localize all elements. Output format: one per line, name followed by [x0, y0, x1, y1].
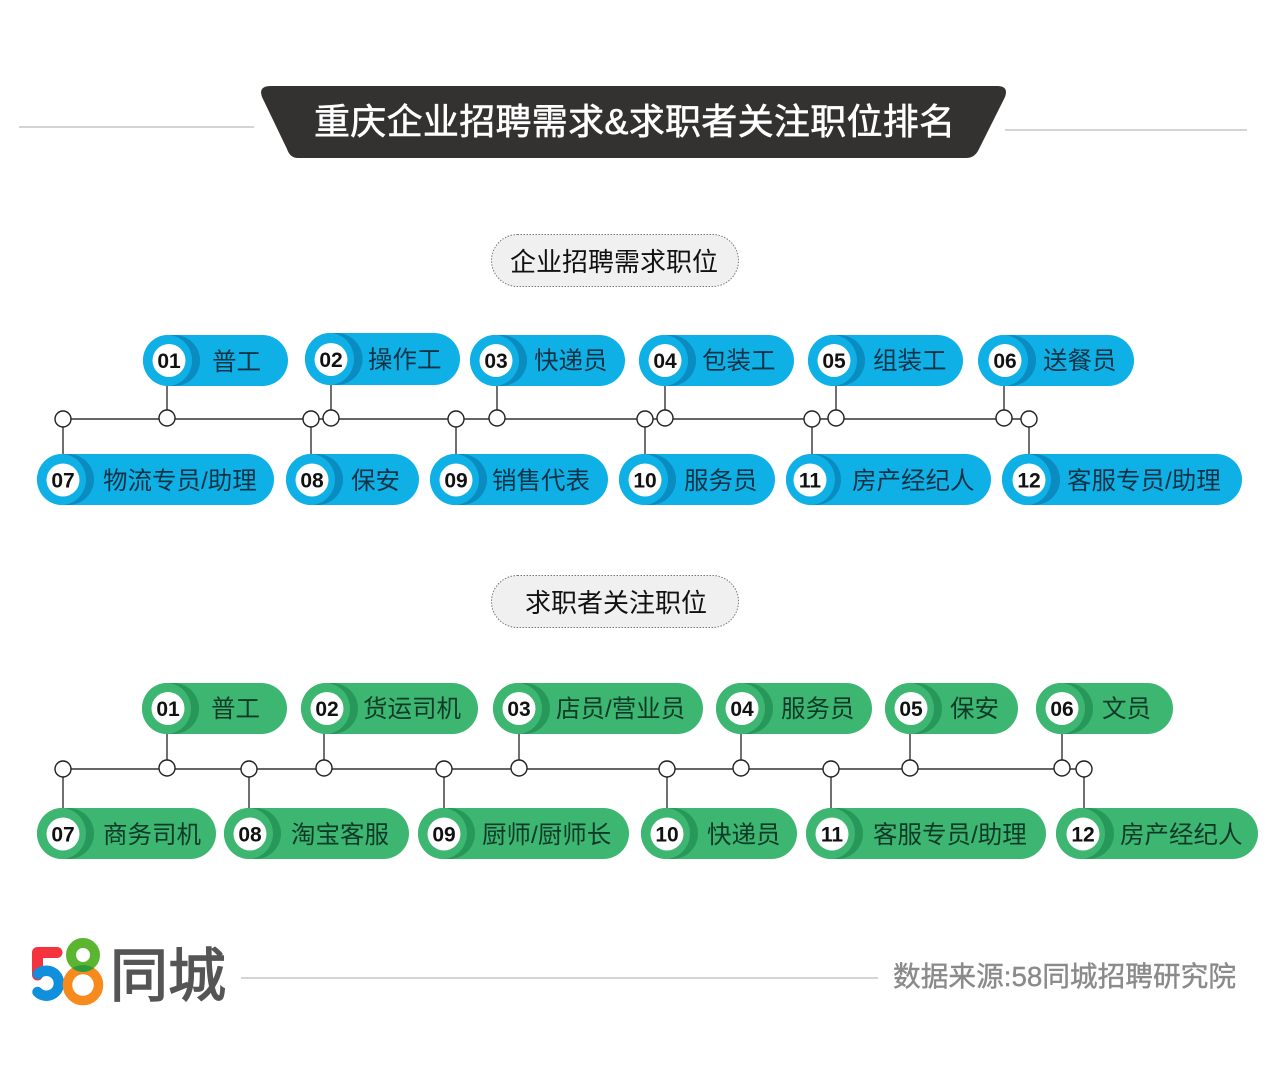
pill: blue 06 送餐员	[978, 335, 1134, 386]
pill: blue 11 房产经纪人: 房产经纪人	[852, 467, 974, 495]
pill: blue 12 客服专员/助理: 客服专员/助理	[1067, 467, 1221, 495]
pill: green 03 店员/营业员	[493, 683, 703, 734]
pill: green 01 普工	[142, 683, 287, 734]
logo: 58同城	[38, 943, 226, 1009]
pill: green 03 店员/营业员: 03	[507, 698, 531, 721]
pill: green 08 淘宝客服	[224, 808, 409, 859]
section label: 企业招聘需求职位	[492, 234, 738, 286]
pill: blue 12 客服专员/助理: 12	[1017, 470, 1041, 492]
pill: green 10 快递员: 快递员	[707, 821, 780, 849]
pill: blue 02 操作工: 02	[319, 349, 343, 372]
pill: blue 11 房产经纪人	[786, 454, 991, 505]
pill: blue 04 包装工	[639, 335, 794, 386]
pill: blue 04 包装工: 包装工	[702, 347, 776, 375]
pill: green 02 货运司机: 货运司机	[363, 695, 461, 723]
pill: blue 10 服务员: 服务员	[684, 467, 758, 495]
pill: green 07 商务司机: 商务司机	[103, 821, 201, 849]
pill: blue 08 保安	[286, 454, 419, 505]
pill: blue 06 送餐员: 送餐员	[1043, 347, 1116, 375]
pill: blue 11 房产经纪人: 11	[799, 470, 821, 492]
pill: green 01 普工: 普工	[211, 695, 260, 723]
pill: green 09 厨师/厨师长: 厨师/厨师长	[482, 821, 611, 849]
title: 重庆企业招聘需求&求职者关注职位排名	[314, 101, 955, 142]
pill: green 10 快递员	[641, 808, 797, 859]
pill: blue 03 快递员	[470, 335, 625, 386]
pill: blue 02 操作工	[305, 333, 460, 385]
pill: green 12 房产经纪人: 12	[1071, 824, 1095, 846]
pill: green 10 快递员: 10	[655, 824, 679, 846]
pill: green 11 客服专员/助理: 客服专员/助理	[873, 821, 1027, 849]
pill: green 11 客服专员/助理: 11	[821, 824, 843, 846]
pill: green 09 厨师/厨师长	[418, 808, 629, 859]
pill: blue 07 物流专员/助理: 物流专员/助理	[103, 467, 257, 495]
pill: blue 02 操作工: 操作工	[368, 346, 442, 374]
pill: blue 07 物流专员/助理	[37, 454, 274, 505]
pill: blue 01 普工: 普工	[212, 348, 261, 376]
pill: blue 01 普工: 01	[157, 350, 181, 373]
pill: blue 10 服务员: 10	[633, 470, 657, 492]
pill: green 06 文员	[1036, 683, 1173, 734]
pill: green 06 文员: 文员	[1102, 695, 1151, 723]
section label: 求职者关注职位	[492, 576, 738, 628]
section label: 企业招聘需求职位: 企业招聘需求职位	[510, 247, 718, 277]
pill: green 05 保安	[885, 683, 1018, 734]
pill: green 02 货运司机: 02	[315, 698, 339, 721]
pill: blue 09 销售代表: 09	[444, 470, 468, 492]
pill: green 07 商务司机	[37, 808, 216, 859]
pill: blue 08 保安: 08	[300, 470, 324, 492]
timeline: employer demand	[55, 385, 1037, 454]
logo wordmark: 同城	[110, 944, 226, 1009]
pill: blue 10 服务员	[619, 454, 775, 505]
pill: green 04 服务员	[716, 683, 872, 734]
pill: green 03 店员/营业员: 店员/营业员	[556, 695, 685, 723]
pill: blue 09 销售代表: 销售代表	[492, 467, 590, 495]
pill: green 08 淘宝客服: 08	[238, 824, 262, 846]
source note: 数据来源:58同城招聘研究院	[893, 961, 1236, 992]
pill: blue 06 送餐员: 06	[993, 350, 1017, 373]
pill: blue 04 包装工: 04	[653, 350, 677, 373]
pill: green 02 货运司机	[301, 683, 478, 734]
title banner	[261, 86, 1006, 158]
pill: green 12 房产经纪人	[1056, 808, 1258, 859]
pill: green 09 厨师/厨师长: 09	[432, 824, 456, 846]
pill: blue 12 客服专员/助理	[1002, 454, 1242, 505]
pill: blue 05 组装工: 组装工	[873, 347, 946, 375]
pill: green 05 保安: 05	[899, 698, 923, 721]
pill: blue 08 保安: 保安	[351, 467, 400, 495]
pill: blue 09 销售代表	[430, 454, 608, 505]
pill: blue 03 快递员: 快递员	[534, 347, 608, 375]
pill: green 07 商务司机: 07	[51, 824, 75, 846]
pill: blue 07 物流专员/助理: 07	[51, 470, 75, 492]
timeline: job seeker interest	[55, 734, 1092, 808]
pill: green 08 淘宝客服: 淘宝客服	[291, 821, 389, 849]
pill: green 05 保安: 保安	[950, 695, 999, 723]
pill: blue 01 普工	[143, 335, 288, 386]
pill: green 11 客服专员/助理	[806, 808, 1046, 859]
pill: green 01 普工: 01	[156, 698, 180, 721]
pill: green 04 服务员: 服务员	[781, 695, 854, 723]
pill: green 04 服务员: 04	[730, 698, 754, 721]
section label: 求职者关注职位: 求职者关注职位	[525, 588, 707, 618]
pill: green 12 房产经纪人: 房产经纪人	[1120, 821, 1242, 849]
pill: blue 05 组装工: 05	[822, 350, 846, 373]
pill: blue 05 组装工	[808, 335, 963, 386]
pill: blue 03 快递员: 03	[484, 350, 508, 373]
pill: green 06 文员: 06	[1050, 698, 1074, 721]
